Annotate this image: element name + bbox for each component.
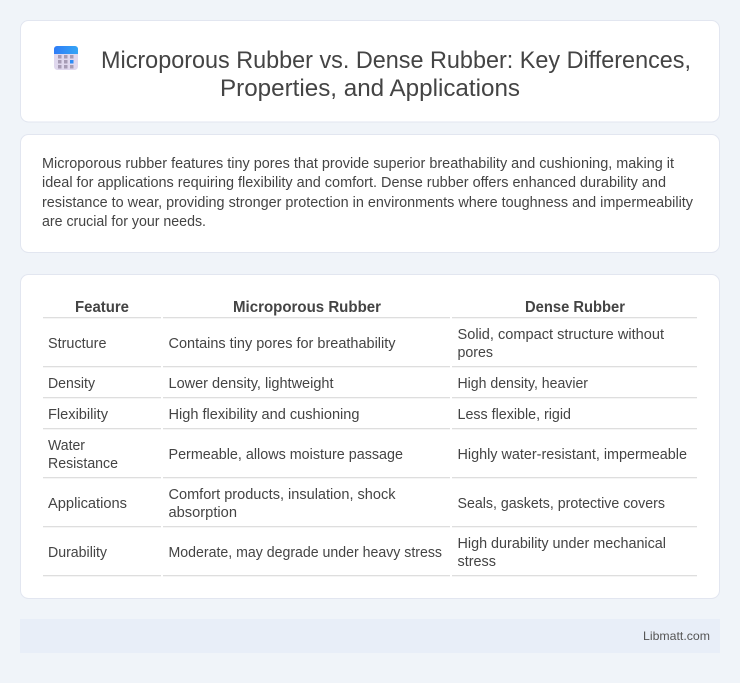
row: applications: Seals, gaskets, protective covers	[458, 496, 665, 512]
panel: introduction	[20, 134, 720, 252]
row: durability: stress	[458, 554, 496, 570]
row: applications: Comfort products, insulation, shock	[168, 487, 396, 503]
row: durability: Durability	[48, 545, 108, 561]
row: density	[48, 376, 588, 392]
row: flexibility: Less flexible, rigid	[458, 407, 571, 423]
row: flexibility: High flexibility and cushioning	[168, 407, 360, 423]
row: density: High density, heavier	[458, 376, 588, 392]
text block: introduction paragraph: resistance to wear, providing stronger protection in environments where toughness and impermeability	[42, 195, 694, 211]
icon: calendar grid	[54, 46, 78, 70]
text block: introduction paragraph: Microporous rubber features tiny pores that provide superior breathability and cushioning, making it	[42, 156, 674, 172]
row: water resistance: Highly water-resistant, impermeable	[458, 447, 687, 463]
row: structure: Solid, compact structure without	[458, 327, 664, 343]
row: density: Lower density, lightweight	[168, 376, 334, 392]
row: density: Density	[48, 376, 96, 392]
row: water resistance: Permeable, allows moisture passage	[168, 447, 403, 463]
text block: introduction paragraph: ideal for applications requiring flexibility and comfort. Dense rubber offers enhanced durability and	[42, 175, 666, 191]
row: durability: High durability under mechanical	[458, 536, 666, 552]
table header: Dense Rubber	[525, 299, 625, 316]
row: durability	[48, 536, 666, 570]
title: Microporous Rubber vs. Dense Rubber: Key Differences,	[101, 47, 691, 74]
row: water resistance: Water	[48, 438, 85, 454]
footer bar	[20, 619, 720, 653]
table header: Feature	[75, 299, 129, 316]
footer credit: Libmatt.com	[643, 629, 710, 643]
row: applications	[48, 487, 665, 521]
row: applications: absorption	[168, 505, 237, 521]
title	[101, 47, 691, 102]
text block: introduction paragraph: are crucial for your needs.	[42, 214, 206, 230]
table header: Microporous Rubber	[233, 299, 381, 316]
row: flexibility: Flexibility	[48, 407, 109, 423]
title: Properties, and Applications	[220, 75, 520, 102]
panel: title card	[20, 20, 720, 122]
row: structure	[48, 327, 664, 361]
table header	[75, 299, 625, 316]
row: applications: Applications	[48, 496, 127, 512]
row: structure: Structure	[48, 336, 106, 352]
panel: comparison table	[20, 274, 720, 598]
row: flexibility	[48, 407, 571, 423]
row: water resistance: Resistance	[48, 456, 118, 472]
row: structure: Contains tiny pores for breathability	[168, 336, 396, 352]
row: structure: pores	[458, 345, 493, 361]
row: water resistance	[48, 438, 687, 472]
text block: introduction paragraph	[42, 156, 694, 230]
row: durability: Moderate, may degrade under heavy stress	[168, 545, 442, 561]
